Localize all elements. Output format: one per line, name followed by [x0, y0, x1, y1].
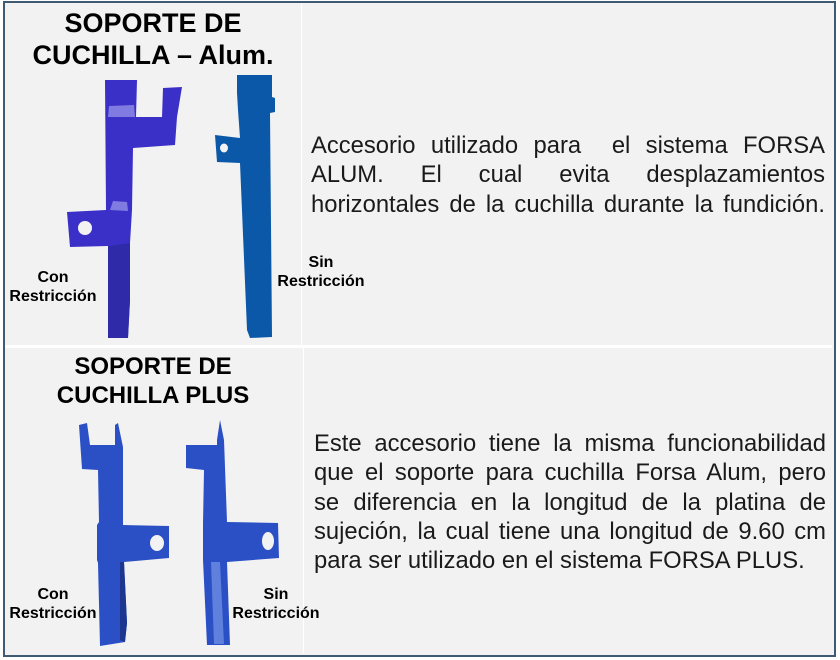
vertical divider lower row — [303, 348, 304, 653]
heading: soporte de cuchilla plus — [57, 353, 249, 409]
label: sin restriccion lower: Restricción — [232, 605, 320, 622]
label: sin restriccion upper: Sin — [309, 254, 333, 271]
text block: plus description: se diferencia en la longitud de la platina de — [314, 489, 826, 516]
heading: soporte de cuchilla plus: CUCHILLA PLUS — [57, 382, 249, 409]
text block: plus description — [314, 430, 826, 574]
label: con restriccion lower: Restricción — [9, 605, 97, 622]
text block: plus description: para ser utilizado en el sistema FORSA PLUS. — [314, 547, 805, 574]
text block: alum description — [311, 132, 825, 218]
label: con restriccion upper: Restricción — [9, 288, 97, 305]
heading: soporte de cuchilla alum: CUCHILLA – Alum. — [32, 40, 274, 70]
horizontal divider between rows — [5, 345, 832, 348]
text block: plus description: que el soporte para cuchilla Forsa Alum, pero — [314, 459, 826, 486]
text block: plus description: sujeción, la cual tiene una longitud de 9.60 cm — [314, 518, 826, 545]
text block: alum description: horizontales de la cuchilla durante la fundición. — [311, 191, 825, 218]
label: con restriccion lower — [9, 586, 97, 622]
heading: soporte de cuchilla alum: SOPORTE DE — [64, 8, 242, 38]
vertical divider upper row — [301, 3, 302, 345]
label: con restriccion lower: Con — [37, 586, 69, 603]
label: sin restriccion lower — [232, 586, 320, 622]
label: sin restriccion upper: Restricción — [277, 273, 365, 290]
icon: plus support with restriction — [79, 423, 169, 646]
label: con restriccion upper: Con — [37, 269, 69, 286]
heading: soporte de cuchilla alum — [32, 8, 274, 70]
heading: soporte de cuchilla plus: SOPORTE DE — [74, 353, 232, 380]
text block: alum description: ALUM. El cual evita desplazamientos — [311, 161, 825, 188]
label: con restriccion upper — [9, 269, 97, 305]
label: sin restriccion upper — [277, 254, 365, 290]
icon: alum support without restriction — [215, 75, 275, 338]
text block: plus description: Este accesorio tiene la misma funcionabilidad — [314, 430, 826, 457]
icon: plus support without restriction — [186, 420, 279, 645]
icon: alum support with restriction — [67, 80, 182, 338]
text block: alum description: Accesorio utilizado para el sistema FORSA — [311, 132, 825, 159]
label: sin restriccion lower: Sin — [264, 586, 288, 603]
